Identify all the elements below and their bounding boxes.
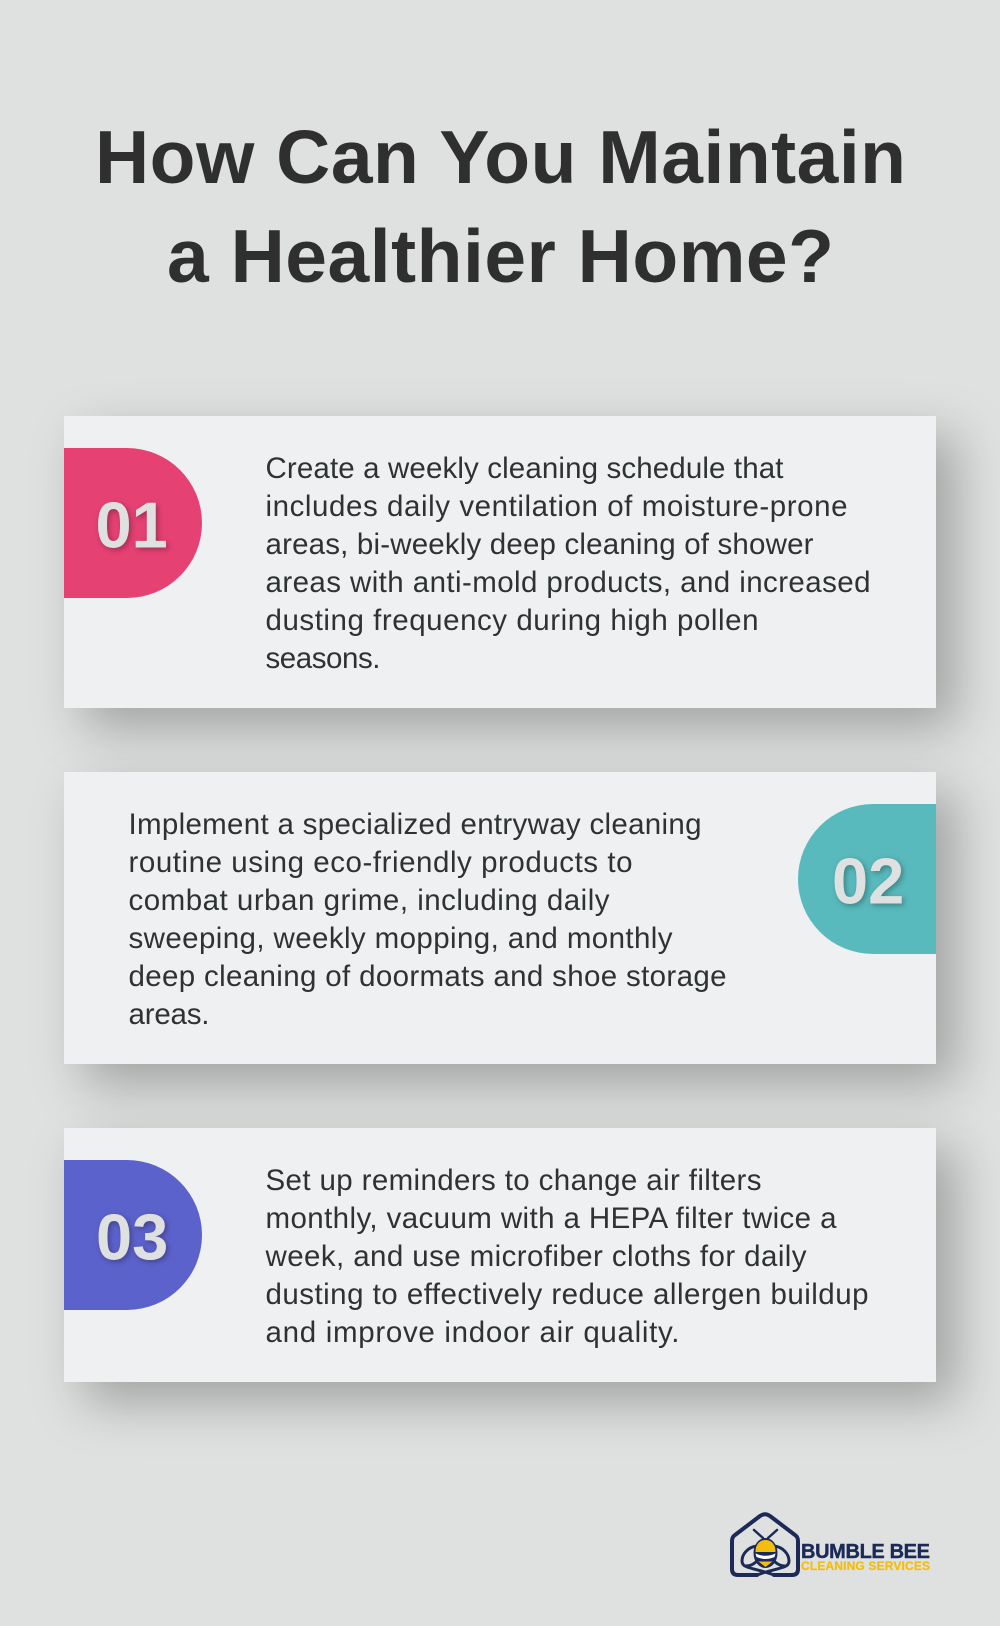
badge 03: 03 <box>96 1200 168 1274</box>
text block 01: dusting frequency during high pollen <box>266 604 758 637</box>
text block 01: areas with anti-mold products, and increased <box>266 566 870 599</box>
text block 02: Implement a specialized entryway cleaning <box>128 808 702 841</box>
title: How Can You Maintain <box>95 115 906 199</box>
text block 01: includes daily ventilation of moisture-prone <box>266 490 848 523</box>
card background 02 <box>64 772 936 1064</box>
card background 03 <box>64 1128 936 1382</box>
badge 03 <box>64 1160 202 1310</box>
text block 03: dusting to effectively reduce allergen buildup <box>266 1278 868 1311</box>
text block 02: deep cleaning of doormats and shoe storage <box>128 960 726 993</box>
tagline: CLEANING SERVICES <box>801 1559 930 1573</box>
text block 02: areas. <box>128 998 210 1031</box>
text block 02 <box>128 808 726 1031</box>
text block 02: routine using eco-friendly products to <box>128 846 632 879</box>
text block 03: Set up reminders to change air filters <box>266 1164 762 1197</box>
icon: house with bee <box>732 1514 798 1575</box>
title: a Healthier Home? <box>167 214 834 298</box>
text block 01: Create a weekly cleaning schedule that <box>266 452 784 485</box>
text block 03: monthly, vacuum with a HEPA filter twice a <box>266 1202 837 1235</box>
badge 01: 01 <box>96 488 168 562</box>
text block 03: and improve indoor air quality. <box>266 1316 680 1349</box>
badge 02 <box>798 804 936 954</box>
text block 02: combat urban grime, including daily <box>128 884 610 917</box>
logo: Bumble Bee Cleaning Services <box>732 1514 930 1575</box>
panel: step 01 <box>64 416 936 708</box>
title <box>95 115 906 298</box>
panel: step 03 <box>64 1128 936 1382</box>
badge 02: 02 <box>832 844 904 918</box>
text block 03 <box>264 1164 868 1349</box>
text block 01 <box>266 452 870 675</box>
wordmark: BUMBLE BEE <box>801 1541 930 1563</box>
text block 01: seasons. <box>266 642 380 675</box>
text block 02: sweeping, weekly mopping, and monthly <box>128 922 673 955</box>
badge 01 <box>64 448 202 598</box>
panel: step 02 <box>64 772 936 1064</box>
text block 03: week, and use microfiber cloths for daily <box>264 1240 807 1273</box>
card background 01 <box>64 416 936 708</box>
text block 01: areas, bi-weekly deep cleaning of shower <box>266 528 814 561</box>
